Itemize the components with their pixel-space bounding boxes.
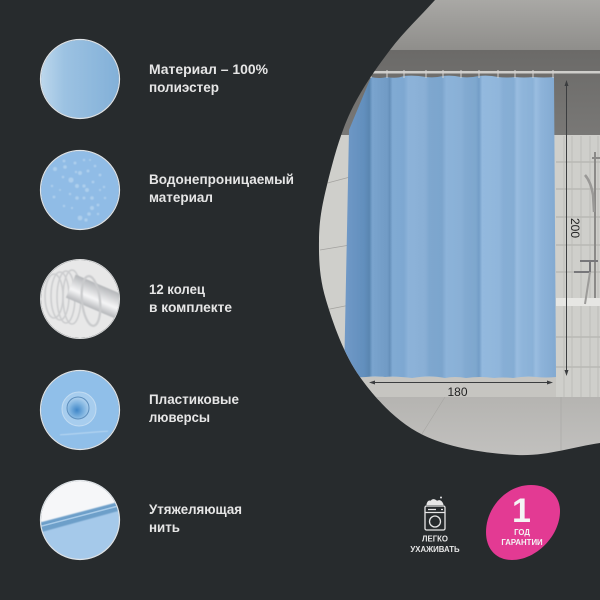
tap and shower [574,152,600,304]
text: weighted thread [149,502,242,535]
number: 1 [512,492,531,530]
text: waterproof [149,172,294,205]
swatch: rings on a rod [40,259,120,339]
text: warranty [501,528,543,547]
icon: washing machine [425,496,445,530]
text: waterproof: материал [149,190,213,205]
text: warranty: ГАРАНТИИ [501,538,543,547]
text: warranty: ГОД [514,528,530,537]
dimension: width 180: 180 [447,385,468,399]
text: rings [149,282,232,315]
feature: grommets [40,370,239,450]
photo: bathroom with blue curtain [300,0,600,467]
swatch: fabric [40,40,120,118]
text: easy care [410,534,460,554]
swatch: water drops [40,150,120,230]
text: material: полиэстер [149,80,219,95]
feature: material [40,40,268,118]
swatch: weight cord [40,480,120,560]
pink blob [486,485,560,560]
text: rings: 12 колец [149,282,206,297]
feature: waterproof [40,150,294,230]
text: easy care: УХАЖИВАТЬ [410,545,460,554]
text: weighted thread: нить [149,520,180,535]
badge: easy care [410,496,460,554]
text: rings: в комплекте [149,300,232,315]
skirting tiles below curtain [340,377,556,397]
ceiling [390,0,600,50]
text: grommets: люверсы [149,410,210,425]
curtain rings [371,70,553,78]
text: material: Материал – 100% [149,62,268,77]
feature: weighted thread [40,480,242,560]
upper wall [341,50,600,136]
text: material [149,62,268,95]
text: weighted thread: Утяжеляющая [149,502,242,517]
dimension: width 180 [369,380,553,399]
dimension: height 200 [564,80,582,376]
text: grommets: Пластиковые [149,392,239,407]
dimension: height 200: 200 [568,218,582,238]
bathtub rim [556,298,600,306]
curtain [344,76,556,378]
text: easy care: ЛЕГКО [422,534,448,544]
tiled wall [300,135,600,400]
feature: rings [40,260,232,338]
swatch: plastic grommet [40,370,120,450]
badge: 1 year warranty [486,485,560,560]
floor [376,397,600,456]
text: waterproof: Водонепроницаемый [149,172,294,187]
curtain rod [372,71,600,74]
text: grommets [149,392,239,425]
